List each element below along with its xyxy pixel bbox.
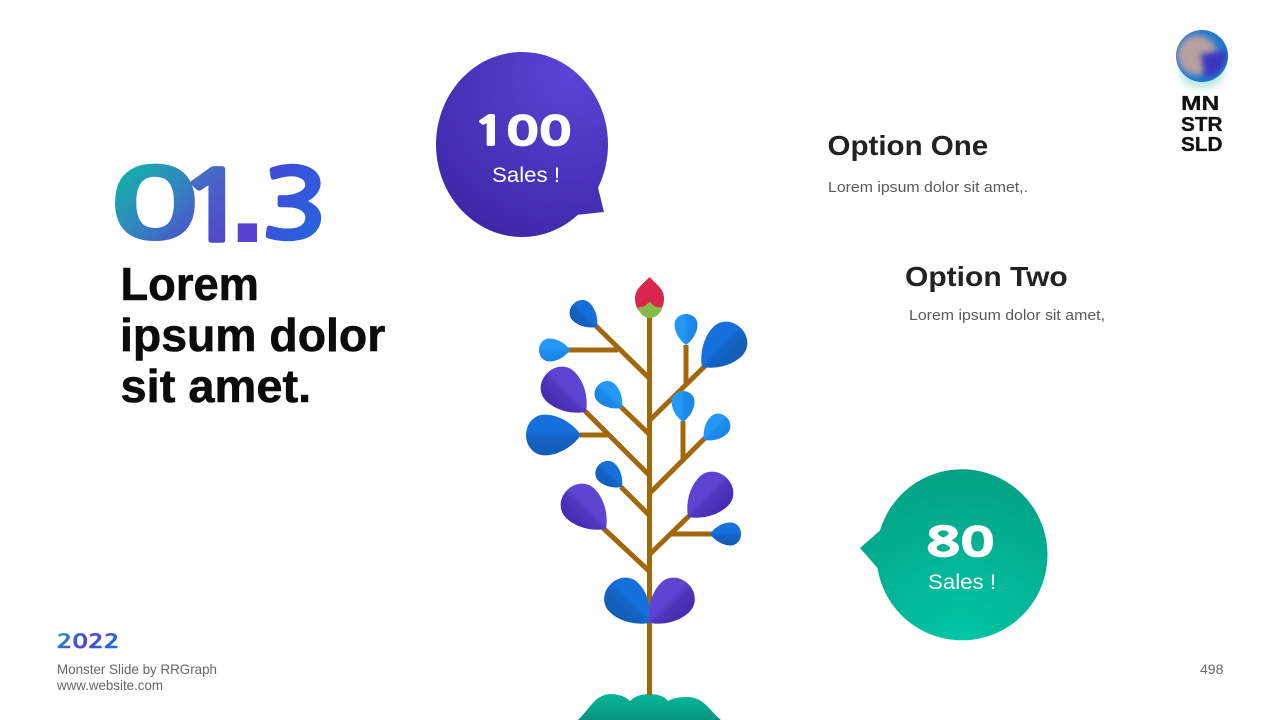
- main heading: sit amet.: [120, 360, 311, 412]
- callout: 80 sales: Sales !: [928, 570, 996, 594]
- flower bud: [635, 277, 664, 318]
- big number 01.3: 3: [260, 158, 329, 254]
- footer left: 2022: [56, 633, 120, 651]
- logo: MN: [1181, 92, 1219, 114]
- big number 01.3: .: [228, 129, 266, 269]
- option two: Lorem ipsum dolor sit amet,: [909, 307, 1105, 324]
- soil mounds: [578, 694, 721, 720]
- main heading: Lorem: [120, 259, 259, 310]
- footer left: Monster Slide by RRGraph: [57, 661, 217, 677]
- option one: [828, 131, 1028, 196]
- logo: [1176, 30, 1230, 156]
- callout: 100 sales: 100: [473, 112, 572, 152]
- option one: Option One: [828, 131, 988, 162]
- logo: STR: [1181, 114, 1223, 136]
- callout: 80 sales: [860, 469, 1047, 640]
- plant illustration: [526, 277, 755, 720]
- callout: 80 sales: 80: [926, 524, 994, 562]
- callout: 100 sales: Sales !: [492, 163, 560, 187]
- logo: SLD: [1181, 134, 1223, 156]
- leaves: [526, 295, 755, 637]
- main heading: ipsum dolor: [120, 309, 385, 361]
- callout: 100 sales: [436, 52, 608, 237]
- option two: [905, 262, 1105, 324]
- stem and branches: [568, 310, 712, 695]
- big number 01.3: 1: [176, 159, 252, 256]
- main heading: [120, 259, 385, 412]
- option one: Lorem ipsum dolor sit amet,.: [828, 179, 1028, 196]
- option two: Option Two: [905, 262, 1068, 293]
- page number: 498: [1200, 661, 1224, 677]
- footer left: www.website.com: [56, 677, 163, 693]
- footer left: [56, 633, 217, 693]
- big number 01.3: [108, 129, 329, 269]
- big number 01.3: 0: [108, 158, 201, 253]
